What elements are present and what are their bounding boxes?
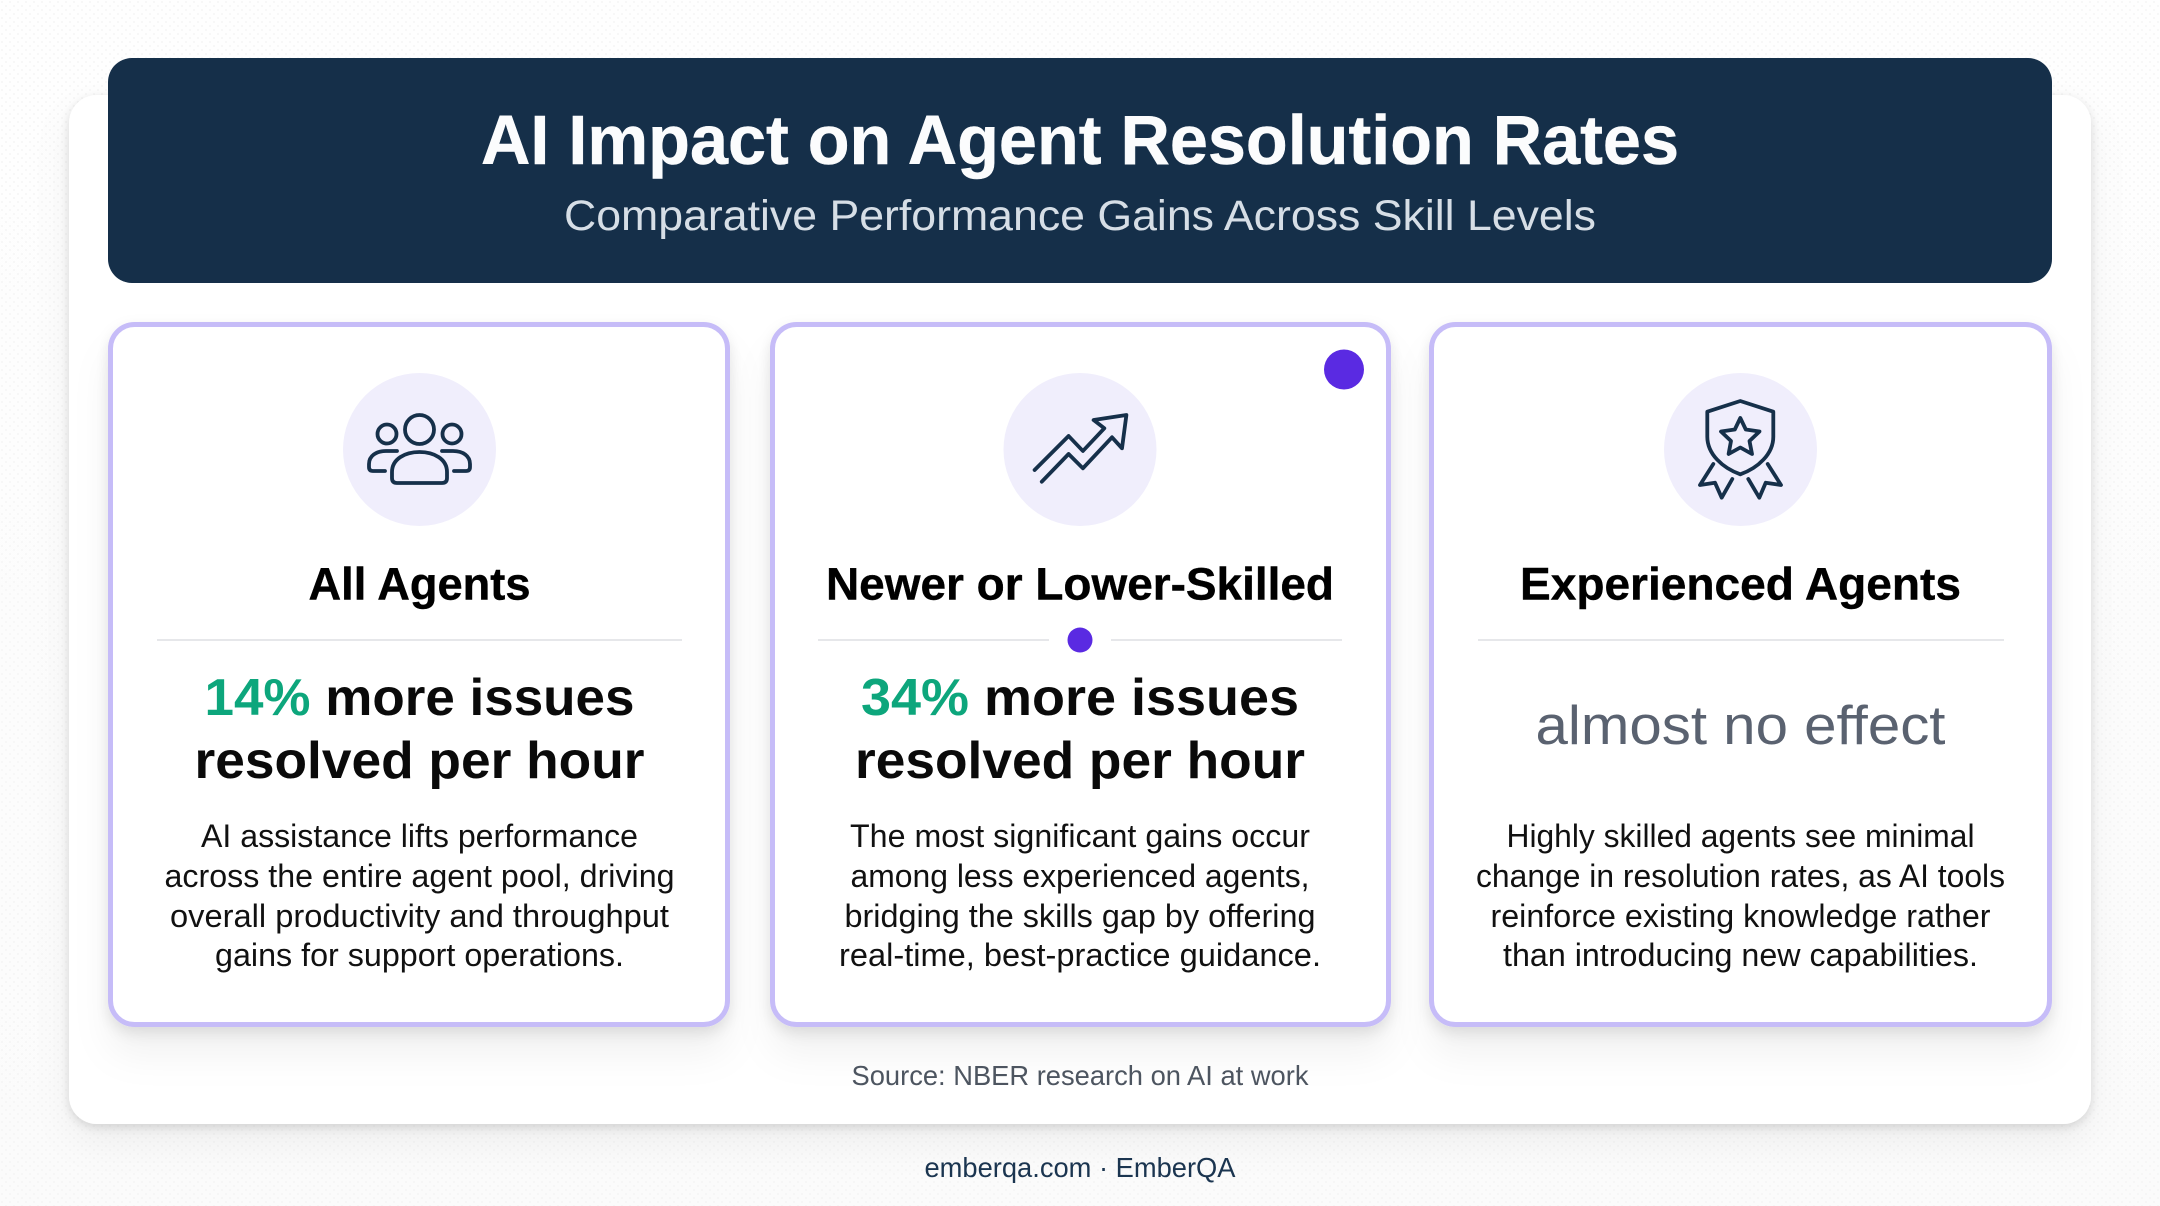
panel: newer or lower-skilled — [772, 324, 1388, 1024]
description: gains for support operations. — [215, 937, 624, 973]
header banner — [108, 58, 2052, 283]
description: The most significant gains occur — [850, 818, 1310, 854]
description: AI assistance lifts performance — [201, 818, 638, 854]
highlight dot — [1324, 350, 1364, 390]
heading: All Agents — [308, 558, 530, 610]
description — [1476, 818, 2005, 973]
icon: award shield with star — [1664, 373, 1817, 526]
description: real-time, best-practice guidance. — [839, 937, 1321, 973]
description: overall productivity and throughput — [170, 898, 669, 934]
description: across the entire agent pool, driving — [164, 858, 674, 894]
description — [164, 818, 674, 973]
heading: Experienced Agents — [1520, 558, 1961, 610]
icon: group of people — [343, 373, 496, 526]
icon: trending up arrow — [1004, 373, 1156, 526]
source note: Source: NBER research on AI at work — [852, 1060, 1309, 1091]
stat: resolved per hour — [855, 732, 1305, 790]
stat: resolved per hour — [194, 732, 644, 790]
divider dot — [1068, 628, 1092, 652]
title: AI Impact on Agent Resolution Rates — [481, 101, 1679, 179]
description: Highly skilled agents see minimal — [1506, 818, 1974, 854]
stat: 34% more issues — [861, 669, 1299, 727]
stat: 14% more issues — [204, 669, 634, 727]
subtitle: Comparative Performance Gains Across Skill Levels — [564, 192, 1596, 240]
description: change in resolution rates, as AI tools — [1476, 858, 2005, 894]
description: reinforce existing knowledge rather — [1490, 898, 1991, 934]
stat — [855, 669, 1305, 790]
footer: emberqa.com · EmberQA — [924, 1152, 1236, 1183]
stat — [194, 669, 644, 790]
stat: almost no effect — [1536, 694, 1946, 756]
description: among less experienced agents, — [850, 858, 1310, 894]
panel: experienced agents — [1432, 324, 2050, 1024]
heading: Newer or Lower-Skilled — [826, 558, 1334, 610]
outer white panel — [69, 95, 2091, 1124]
panel: all agents — [110, 324, 728, 1024]
description: than introducing new capabilities. — [1503, 937, 1978, 973]
description: bridging the skills gap by offering — [844, 898, 1316, 934]
description — [839, 818, 1321, 973]
